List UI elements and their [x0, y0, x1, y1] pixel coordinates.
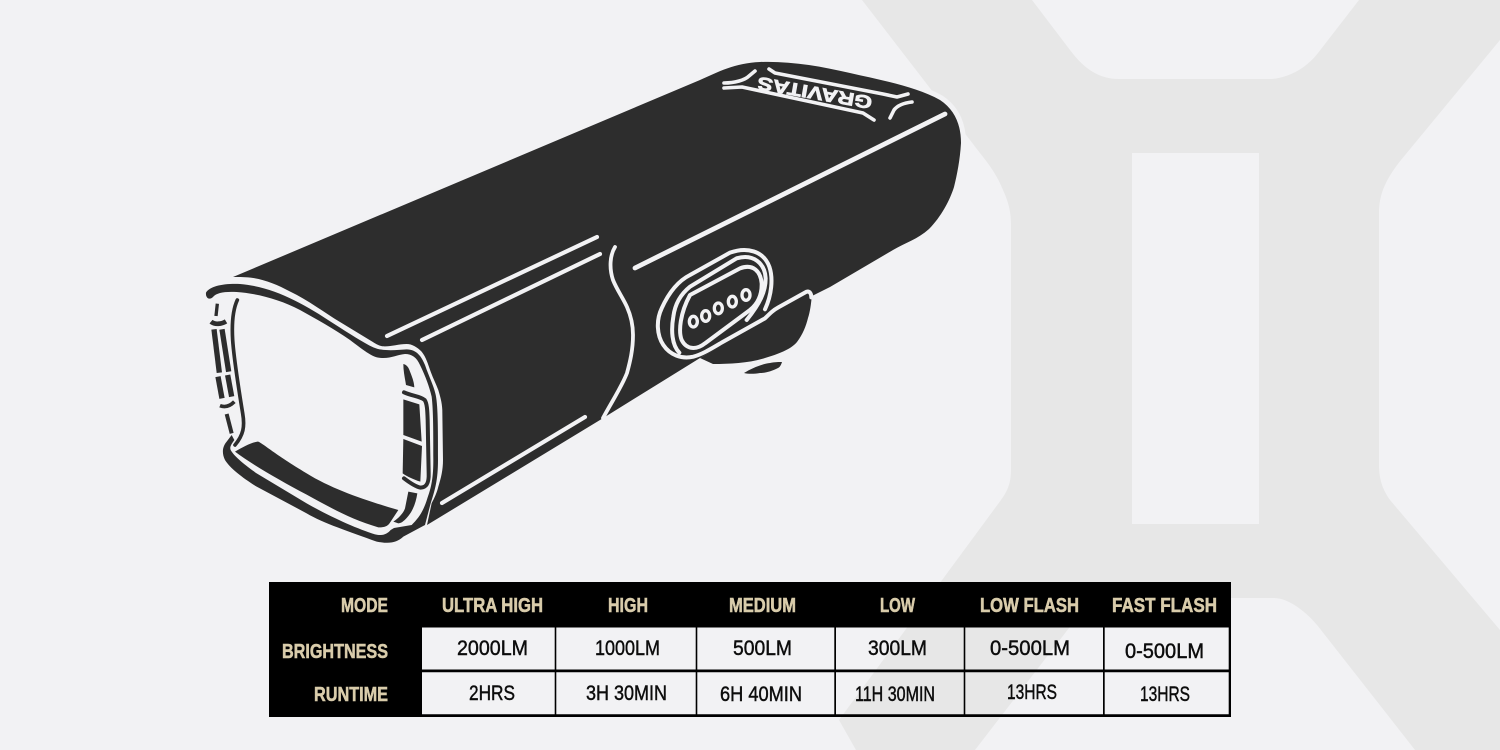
button cluster with five LEDs [658, 250, 811, 357]
row: mode: MEDIUM [729, 595, 796, 617]
row: mode: MODE [341, 595, 388, 617]
upper right side tab [403, 364, 414, 387]
row: brightness: 500LM [733, 637, 792, 660]
outer button ring and mount edge [658, 250, 811, 357]
mode specification table [269, 582, 1231, 717]
flashlight body [233, 62, 961, 525]
flashlight illustration [206, 62, 961, 543]
row: brightness: BRIGHTNESS [282, 641, 388, 663]
bezel ring [206, 284, 438, 543]
row: runtime: RUNTIME [314, 684, 388, 706]
row: runtime: 2HRS [469, 682, 515, 705]
mount bracket [700, 294, 812, 364]
row: brightness: 0-500LM [1125, 640, 1204, 663]
left inner rib [232, 300, 244, 445]
row: runtime: 3H 30MIN [586, 682, 667, 705]
row: runtime: 13HRS [1007, 681, 1057, 704]
row: runtime [314, 681, 1190, 706]
row: mode: LOW [880, 595, 915, 617]
background logo X mark [839, 0, 1500, 750]
row: brightness: 0-500LM [990, 637, 1070, 660]
lens bezel and side details [206, 284, 438, 543]
lower side button [403, 439, 422, 482]
badge brackets [724, 69, 912, 120]
row: mode: ULTRA HIGH [442, 595, 543, 617]
brand badge [724, 69, 912, 120]
LED dots [689, 290, 750, 327]
row: mode [341, 595, 1217, 617]
row: runtime: 11H 30MIN [855, 683, 935, 706]
small mount foot [744, 362, 782, 374]
row: brightness: 300LM [868, 637, 927, 660]
lower right tab [393, 492, 417, 523]
side panel lines [387, 114, 945, 503]
table frame and header [269, 582, 1231, 717]
brand name, upside down: GRAVITAS [756, 73, 874, 113]
row: brightness: 1000LM [595, 637, 660, 660]
row: brightness [282, 637, 1204, 663]
lower lens bar [235, 442, 398, 527]
row: brightness: 2000LM [457, 637, 528, 660]
inner button ring [680, 267, 762, 348]
button frame [404, 392, 429, 488]
middle button ring [672, 257, 766, 353]
row: mode: FAST FLASH [1112, 595, 1217, 617]
upper side button [403, 399, 422, 442]
row: runtime: 13HRS [1140, 683, 1190, 706]
row: mode: LOW FLASH [980, 595, 1079, 617]
row: runtime: 6H 40MIN [720, 683, 802, 706]
left rib details [211, 304, 234, 433]
row: mode: HIGH [608, 595, 648, 617]
